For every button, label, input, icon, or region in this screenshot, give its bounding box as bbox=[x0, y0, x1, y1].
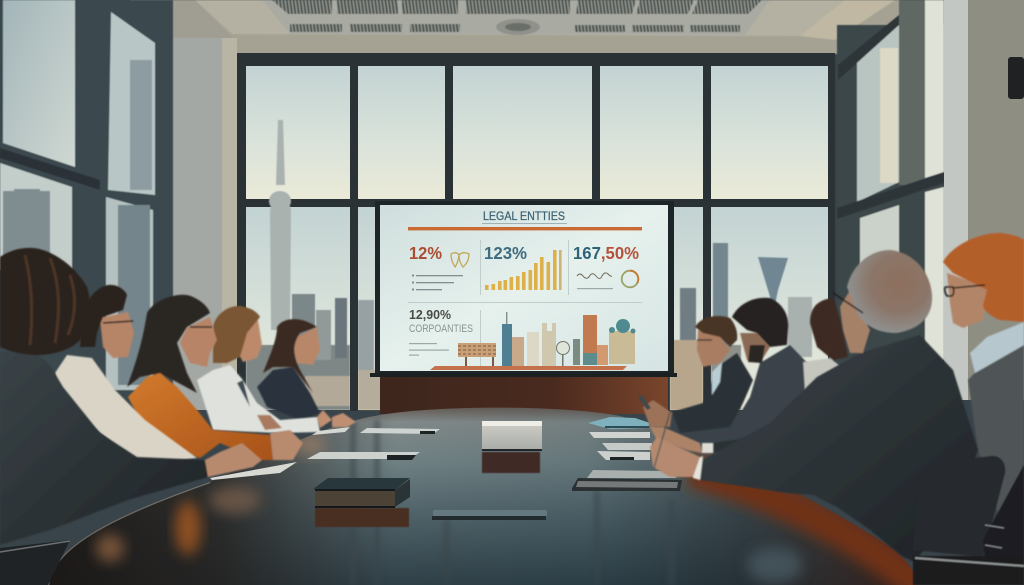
ring gauge bbox=[622, 271, 638, 287]
screen frame bbox=[375, 201, 674, 375]
phone on table bbox=[432, 510, 547, 520]
skyline buildings right bbox=[670, 243, 812, 410]
dividers bbox=[408, 240, 642, 368]
left pillar bbox=[172, 38, 237, 410]
window panes sky bbox=[246, 66, 828, 410]
right pillar bbox=[944, 0, 1024, 400]
attendee: man in suit with glasses bbox=[638, 316, 753, 433]
table surface bbox=[48, 408, 918, 585]
attendee: person with glasses, cream blouse bbox=[55, 285, 197, 465]
small caption bbox=[409, 343, 449, 356]
attendee: woman with ponytail, dark blazer bbox=[257, 319, 356, 427]
ceiling with vents bbox=[130, 0, 900, 54]
table reflections bbox=[350, 420, 675, 585]
conference table bbox=[48, 408, 925, 585]
bar chart bbox=[485, 250, 562, 290]
office chair bbox=[913, 456, 1024, 585]
bullet list bbox=[412, 274, 463, 290]
attendee: woman hidden behind bbox=[650, 298, 848, 453]
screen surface bbox=[380, 205, 668, 371]
attendee: foreground person in dark jacket bbox=[0, 248, 262, 545]
stat 123%: 123% bbox=[484, 243, 527, 263]
stat 12,90%: 12,90% bbox=[409, 307, 451, 322]
left side window bbox=[0, 0, 173, 400]
wall speaker bbox=[1008, 57, 1024, 99]
attendee: older man in foreground bbox=[650, 250, 978, 562]
wood credenza under screen bbox=[380, 376, 668, 414]
icon: hearts bbox=[451, 253, 469, 267]
title rule bbox=[408, 227, 642, 230]
right side window bbox=[837, 0, 945, 405]
white box on table bbox=[482, 421, 542, 473]
wave line bbox=[577, 273, 612, 278]
tower in skyline bbox=[269, 120, 291, 330]
warm glow on table edge bbox=[48, 433, 925, 585]
chair left foreground bbox=[0, 540, 70, 585]
skyline buildings left bbox=[246, 294, 388, 410]
attendee: woman in orange blazer bbox=[127, 295, 303, 460]
attendee: man with beard bbox=[690, 298, 817, 442]
presentation screen bbox=[370, 201, 677, 377]
city illustration bbox=[430, 312, 636, 370]
papers and pens left bbox=[210, 427, 440, 480]
slide title: LEGAL ENTTIES bbox=[483, 209, 565, 223]
attendee: woman in white blouse bbox=[197, 306, 332, 433]
attendee: woman with red hair and glasses bbox=[943, 233, 1024, 520]
label corporanties: CORPOANTIES bbox=[409, 323, 473, 335]
stat 12%: 12% bbox=[409, 243, 442, 263]
back window with skyline bbox=[237, 53, 835, 411]
papers and folder right bbox=[572, 417, 682, 491]
book on table bbox=[313, 478, 410, 527]
stat 167,50%: 167,50% bbox=[573, 243, 639, 263]
